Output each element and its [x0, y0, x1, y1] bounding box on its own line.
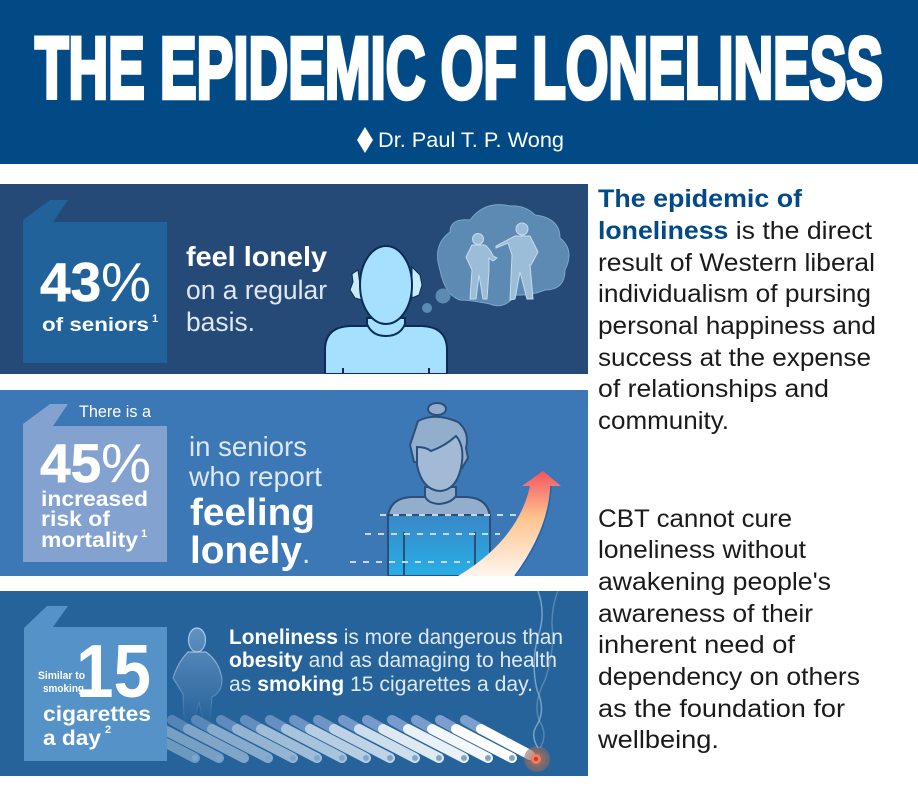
statement text: feel lonely: [186, 241, 327, 272]
stat box: 45%: increased: [41, 488, 148, 511]
statement text: who report: [188, 461, 322, 492]
text block: epidemic of loneliness: personal happiness and: [598, 312, 876, 340]
text block: epidemic of loneliness: success at the expense: [598, 344, 871, 372]
statement text: lonely: [190, 530, 302, 572]
text block: CBT and loneliness: CBT cannot cure: [598, 505, 792, 533]
stat box: 15: cigarettes: [43, 703, 151, 726]
stat box: 43%: 1: [152, 313, 158, 325]
statement text: on a regular: [186, 275, 327, 305]
icon: cigarette ember and smoke: [524, 591, 558, 772]
text block: CBT and loneliness: dependency on others: [598, 663, 860, 691]
stat box: 43%: 43: [40, 251, 101, 313]
statement text: feeling: [190, 492, 315, 534]
stat box: 45%: mortality: [41, 529, 138, 552]
stat box: 45%: 45: [40, 432, 101, 494]
statement text: .: [302, 537, 310, 570]
icon: row of cigarettes: [123, 720, 530, 758]
panel: 45% increased mortality: [0, 390, 588, 576]
stat box: 15: a day: [43, 727, 101, 750]
stat box: 45%: %: [101, 432, 151, 494]
panel: 43% of seniors: [0, 184, 588, 374]
text block: CBT and loneliness: [597, 505, 860, 754]
statement text: in seniors: [189, 431, 307, 462]
icon: thought bubble with two figures: [422, 205, 569, 313]
text block: epidemic of loneliness: result of Western liberal: [598, 249, 875, 277]
author byline: Dr. Paul T. P. Wong: [378, 129, 564, 152]
text block: epidemic of loneliness: The epidemic of: [598, 185, 803, 213]
text block: CBT and loneliness: as the foundation for: [598, 695, 845, 723]
text block: CBT and loneliness: loneliness without: [598, 536, 806, 564]
text block: CBT and loneliness: wellbeing.: [597, 726, 719, 754]
stat box: 45%: risk of: [41, 508, 111, 531]
icon: overweight figure: [173, 628, 222, 722]
statement text: basis.: [186, 307, 255, 337]
text block: epidemic of loneliness: [598, 185, 876, 435]
statement text: [186, 241, 327, 337]
icon: lonely senior: [325, 246, 447, 374]
icon: woman with hair bun: [388, 403, 490, 576]
statement text: obesity and as damaging to health: [229, 649, 557, 672]
stat box: 45%: 1: [141, 528, 147, 540]
stat box: 15: 15: [76, 629, 151, 713]
stat box: 45%: There is a: [79, 402, 152, 421]
text block: CBT and loneliness: awareness of their: [598, 600, 813, 628]
stat box: 43%: %: [101, 251, 151, 313]
header banner: [0, 0, 918, 164]
text block: epidemic of loneliness: of relationships and: [598, 375, 829, 403]
text block: epidemic of loneliness: loneliness is the direct: [598, 217, 872, 245]
statement text: Loneliness is more dangerous than: [229, 626, 563, 649]
panel: 15 cigarettes a day: [0, 591, 588, 776]
statement text: as smoking 15 cigarettes a day.: [229, 673, 533, 696]
stat box: 43%: [23, 200, 167, 363]
dashed level lines: [350, 515, 518, 562]
text block: CBT and loneliness: awakening people's: [598, 568, 831, 596]
stat box: 15: [24, 606, 167, 761]
icon: rising arrow: [458, 471, 561, 576]
stat box: 15: Similar to: [38, 670, 85, 682]
stat box: 43%: of seniors: [42, 315, 149, 336]
text block: epidemic of loneliness: individualism of pursing: [598, 280, 871, 308]
statement text: [188, 431, 322, 572]
statement text: [229, 626, 563, 696]
stat box: 15: smoking: [43, 683, 84, 695]
stat box: 15: 2: [105, 724, 111, 736]
text block: epidemic of loneliness: community.: [598, 407, 729, 435]
text block: CBT and loneliness: inherent need of: [598, 631, 795, 659]
stat box: 45%: [23, 402, 167, 562]
